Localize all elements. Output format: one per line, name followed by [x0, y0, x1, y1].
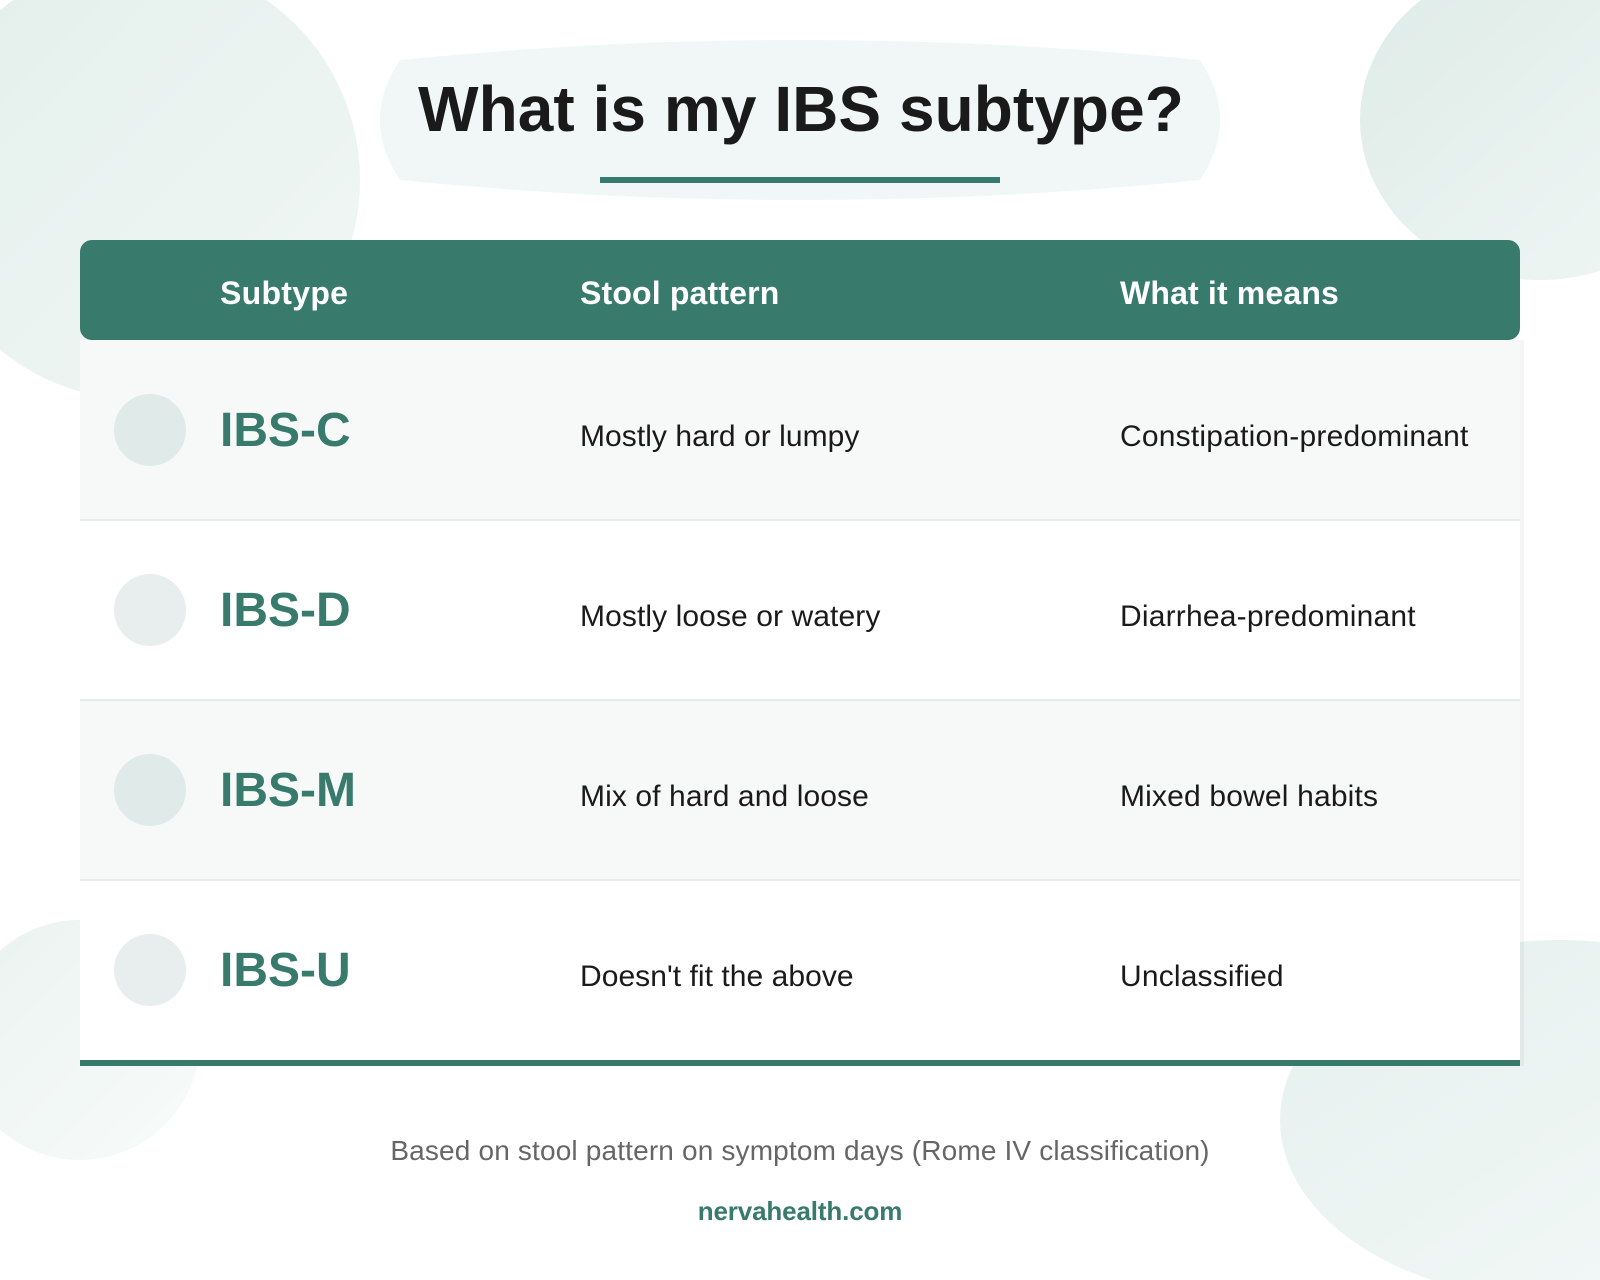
stool pattern: IBS-U: Doesn't fit the above	[580, 960, 854, 993]
table bottom rule	[80, 1060, 1520, 1066]
table header	[80, 240, 1520, 340]
icon placeholder: IBS-D	[114, 574, 186, 646]
meaning: IBS-M: Mixed bowel habits	[1120, 780, 1378, 813]
meaning: IBS-C: Constipation-predominant	[1120, 420, 1469, 453]
row: IBS-M	[80, 701, 1520, 880]
stool pattern: IBS-C: Mostly hard or lumpy	[580, 420, 859, 453]
label: IBS-M: IBS-M	[220, 764, 356, 817]
row: IBS-C	[80, 340, 1520, 520]
stool pattern: IBS-M: Mix of hard and loose	[580, 780, 869, 813]
header: stool pattern: Stool pattern	[580, 275, 779, 311]
label: IBS-C: IBS-C	[220, 404, 351, 457]
icon placeholder: IBS-U	[114, 934, 186, 1006]
title: What is my IBS subtype?	[418, 73, 1184, 145]
meaning: IBS-U: Unclassified	[1120, 960, 1284, 993]
title underline	[600, 177, 1000, 183]
table side shadow	[1520, 340, 1524, 1066]
label: IBS-D: IBS-D	[220, 584, 351, 637]
background blob: top left	[0, 0, 360, 400]
footnote: Based on stool pattern on symptom days (Rome IV classification)	[390, 1135, 1210, 1166]
icon placeholder: IBS-M	[114, 754, 186, 826]
header: subtype: Subtype	[220, 275, 348, 311]
background blob: top right	[1360, 0, 1600, 280]
header: what it means: What it means	[1120, 275, 1339, 311]
background blob: bottom left	[0, 920, 200, 1160]
title background shape	[380, 40, 1220, 200]
row: IBS-U	[80, 881, 1520, 1060]
row: IBS-D	[80, 521, 1520, 700]
website: nervahealth.com	[698, 1196, 902, 1226]
stool pattern: IBS-D: Mostly loose or watery	[580, 600, 880, 633]
meaning: IBS-D: Diarrhea-predominant	[1120, 600, 1416, 633]
icon placeholder: IBS-C	[114, 394, 186, 466]
background blob: bottom right	[1280, 940, 1600, 1280]
label: IBS-U: IBS-U	[220, 944, 351, 997]
